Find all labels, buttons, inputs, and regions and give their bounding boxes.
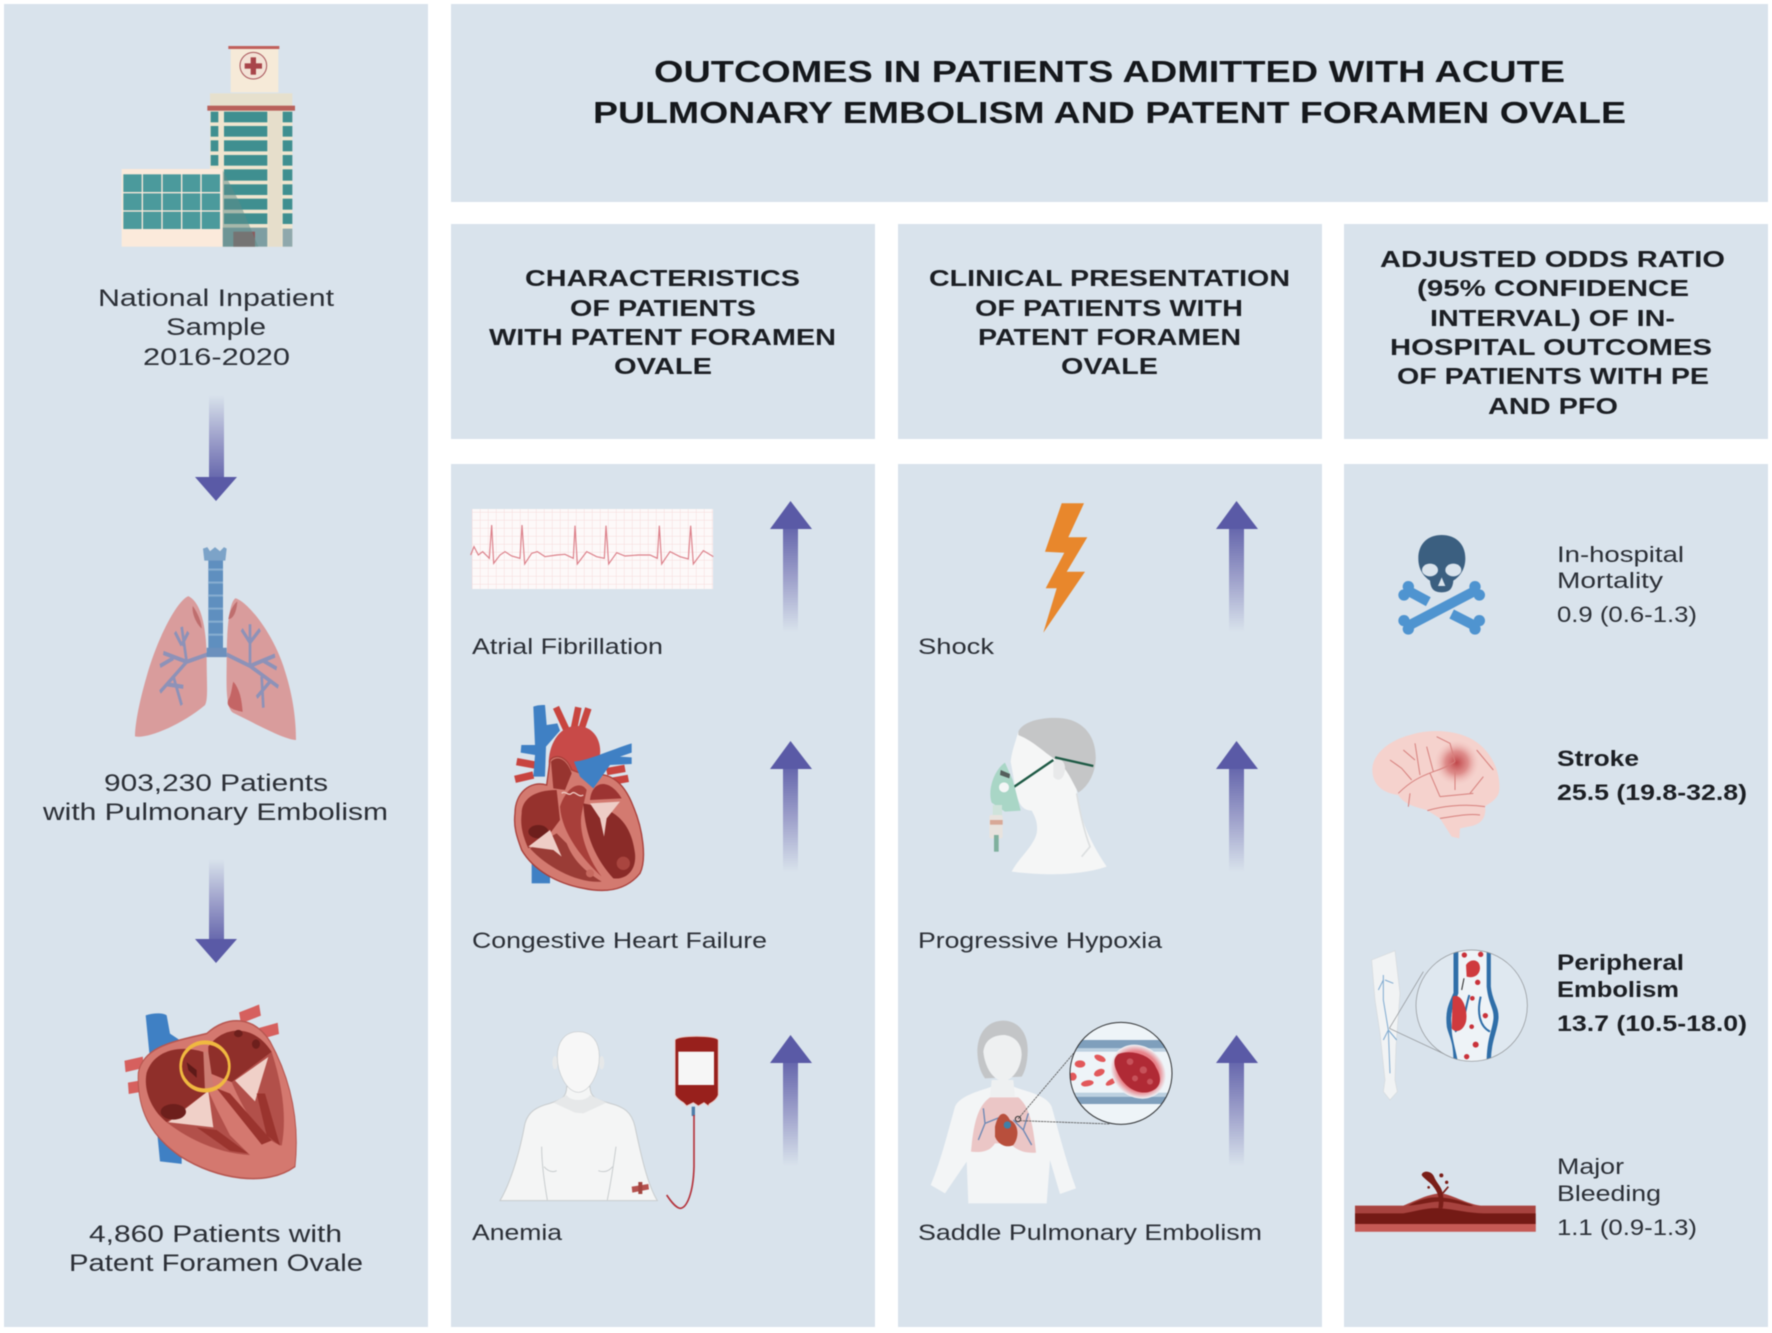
text: national inpatient sample: National Inpatient <box>98 285 334 312</box>
heading: characteristics of patients: OVALE <box>614 353 712 379</box>
text: peripheral embolism <box>1557 950 1747 1036</box>
heading: adjusted odds ratio: AND PFO <box>1488 393 1618 419</box>
icon: leg veins with embolism <box>1372 950 1527 1100</box>
heading: adjusted odds ratio: INTERVAL) OF IN- <box>1430 305 1675 331</box>
arrow: saddle embolism increase <box>1216 1035 1258 1166</box>
text: stroke <box>1557 746 1747 805</box>
text: pulmonary embolism count: with Pulmonary Embolism <box>42 799 388 826</box>
title: PULMONARY EMBOLISM AND PATENT FORAMEN OVALE <box>593 95 1626 130</box>
title: OUTCOMES IN PATIENTS ADMITTED WITH ACUTE <box>654 54 1565 89</box>
label: atrial fibrillation: Atrial Fibrillation <box>472 634 663 659</box>
text: pulmonary embolism count <box>42 770 388 826</box>
heading: clinical presentation: PATENT FORAMEN <box>978 324 1241 350</box>
text: in-hospital mortality: 0.9 (0.6-1.3) <box>1557 602 1697 627</box>
arrow: atrial fibrillation increase <box>770 501 812 632</box>
label: congestive heart failure: Congestive Heart Failure <box>472 928 767 953</box>
text: patent foramen ovale count: Patent Foramen Ovale <box>69 1250 363 1277</box>
arrow: down 2 <box>195 859 237 963</box>
label: saddle pulmonary embolism: Saddle Pulmonary Embolism <box>918 1220 1262 1245</box>
panel: study population <box>4 4 428 1327</box>
text: patent foramen ovale count <box>69 1221 363 1277</box>
text: major bleeding: Major <box>1557 1154 1624 1179</box>
icon: lightning bolt for shock <box>1043 503 1087 633</box>
heading: adjusted odds ratio: OF PATIENTS WITH PE <box>1397 363 1709 389</box>
text: stroke: Stroke <box>1557 746 1639 771</box>
text: patent foramen ovale count: 4,860 Patients with <box>89 1221 342 1248</box>
text: peripheral embolism: Embolism <box>1557 977 1679 1002</box>
panel: odds ratio header <box>1344 224 1768 439</box>
panel: clinical presentation <box>898 464 1322 1327</box>
panel: clinical presentation header <box>898 224 1322 439</box>
text: national inpatient sample: Sample <box>166 314 266 341</box>
icon: patient with blood transfusion <box>500 1032 718 1208</box>
text: in-hospital mortality: In-hospital <box>1557 542 1684 567</box>
panel: characteristics header <box>451 224 875 439</box>
text: major bleeding: Bleeding <box>1557 1181 1661 1206</box>
icon: head with oxygen mask <box>989 718 1107 874</box>
icon: major bleeding <box>1355 1172 1536 1232</box>
panel: characteristics <box>451 464 875 1327</box>
panel: title <box>451 4 1768 202</box>
text: major bleeding: 1.1 (0.9-1.3) <box>1557 1215 1697 1240</box>
icon: lungs <box>135 547 296 740</box>
text: stroke: 25.5 (19.8-32.8) <box>1557 780 1747 805</box>
arrow: hypoxia increase <box>1216 741 1258 872</box>
text: national inpatient sample <box>98 285 334 371</box>
text: in-hospital mortality: Mortality <box>1557 568 1663 593</box>
icon: heart with patent foramen ovale <box>125 1010 296 1179</box>
heading: adjusted odds ratio: HOSPITAL OUTCOMES <box>1390 334 1712 360</box>
label: anemia: Anemia <box>472 1220 563 1245</box>
heading: clinical presentation: OVALE <box>1061 353 1158 379</box>
arrow: down 1 <box>195 395 237 501</box>
text: peripheral embolism: Peripheral <box>1557 950 1684 975</box>
heading: characteristics of patients <box>489 265 836 379</box>
heading: adjusted odds ratio: ADJUSTED ODDS RATIO <box>1380 246 1725 272</box>
icon: skull and crossbones <box>1398 535 1485 635</box>
label: progressive hypoxia: Progressive Hypoxia <box>918 928 1163 953</box>
icon: heart anatomy <box>515 705 643 890</box>
label: shock: Shock <box>918 634 995 659</box>
arrow: anemia increase <box>770 1035 812 1166</box>
icon: woman with saddle pulmonary embolism <box>931 1021 1177 1203</box>
heading: clinical presentation <box>929 265 1290 379</box>
arrow: heart failure increase <box>770 741 812 872</box>
text: peripheral embolism: 13.7 (10.5-18.0) <box>1557 1011 1747 1036</box>
heading: adjusted odds ratio: (95% CONFIDENCE <box>1417 275 1689 301</box>
heading: characteristics of patients: CHARACTERISTICS <box>525 265 800 291</box>
heading: clinical presentation: CLINICAL PRESENTATION <box>929 265 1290 291</box>
text: in-hospital mortality <box>1557 542 1697 627</box>
text: major bleeding <box>1557 1154 1697 1240</box>
text: pulmonary embolism count: 903,230 Patients <box>104 770 328 797</box>
text: national inpatient sample: 2016-2020 <box>143 344 290 371</box>
panel: adjusted odds ratios <box>1344 464 1768 1327</box>
icon: ecg strip <box>471 509 713 589</box>
heading: characteristics of patients: OF PATIENTS <box>570 295 756 321</box>
arrow: shock increase <box>1216 501 1258 632</box>
icon: brain with stroke <box>1372 731 1499 838</box>
heading: characteristics of patients: WITH PATENT FORAMEN <box>489 324 836 350</box>
heading: adjusted odds ratio <box>1380 246 1725 419</box>
heading: clinical presentation: OF PATIENTS WITH <box>975 295 1243 321</box>
icon: hospital building <box>122 46 295 247</box>
title <box>593 54 1626 130</box>
